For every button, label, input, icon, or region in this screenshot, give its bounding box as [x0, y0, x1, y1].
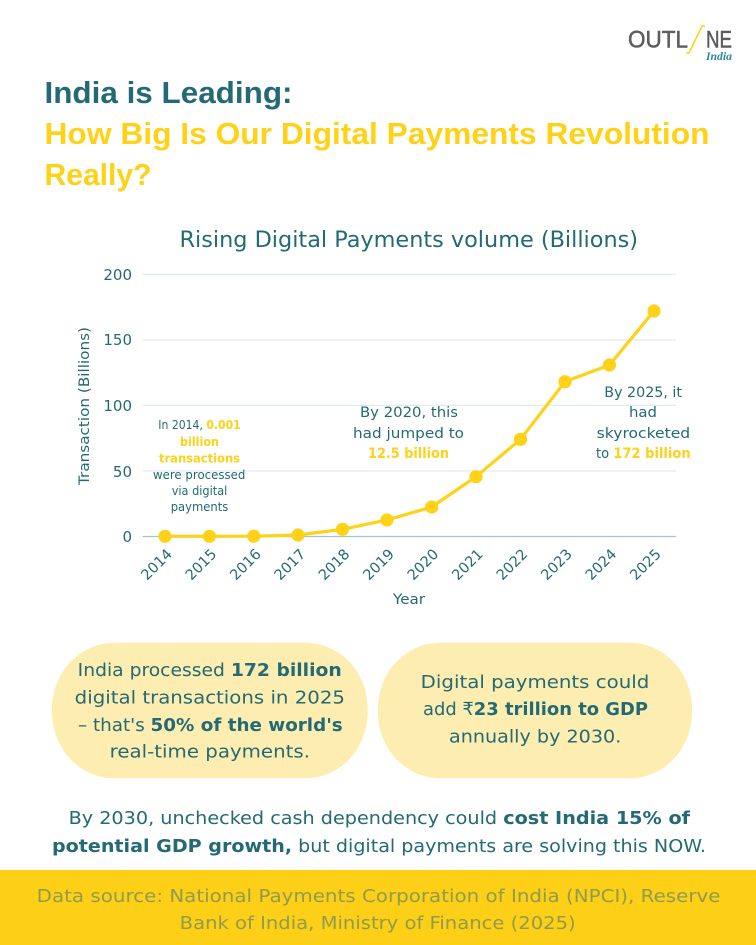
panel: 172 billion transactions: – that's 50% of the world's	[78, 715, 343, 736]
annotation: 2020: By 2020, this	[360, 405, 458, 421]
annotation: 2014: were processed	[153, 468, 245, 482]
panel: 172 billion transactions	[52, 643, 368, 778]
y axis title: Transaction (Billions)	[77, 327, 93, 486]
footer: data source band: Data source: National Payments Corporation of India (NPCI), Reserve	[37, 886, 720, 907]
text block: cash dependency conclusion: By 2030, unchecked cash dependency could cost India 15% of	[69, 808, 690, 829]
x axis labels: 2018	[316, 546, 353, 584]
y axis labels	[103, 266, 132, 546]
annotation: 2014: In 2014, 0.001	[158, 418, 241, 432]
footer: data source band	[0, 870, 756, 945]
annotation: 2025: skyrocketed	[597, 426, 690, 442]
data points	[158, 304, 661, 543]
annotation: 2025: By 2025, it	[604, 385, 682, 401]
x axis labels: 2016	[227, 546, 265, 584]
x axis labels: 2015	[183, 546, 220, 584]
logo: Outline India: NE	[706, 27, 732, 54]
chart title: Rising Digital Payments volume (Billions)	[180, 228, 638, 253]
data line	[165, 311, 654, 536]
annotation: 2014: via digital	[172, 484, 227, 498]
panel: 23 trillion to GDP	[378, 643, 692, 778]
panel: 172 billion transactions: real-time payments.	[110, 742, 310, 763]
annotation: 2020	[353, 405, 464, 462]
panel: 172 billion transactions: digital transactions in 2025	[75, 687, 345, 708]
logo: Outline India: India	[705, 49, 732, 63]
x axis labels: 2014	[138, 546, 176, 584]
x axis labels: 2021	[449, 546, 487, 584]
x axis labels: 2017	[272, 546, 309, 584]
text block: cash dependency conclusion: potential GDP growth, but digital payments are solving this NOW.	[52, 836, 706, 857]
title	[44, 75, 710, 192]
annotation: 2020: 12.5 billion	[368, 446, 449, 462]
x axis labels: 2020	[405, 546, 442, 584]
x axis labels: 2025	[627, 546, 665, 584]
x axis labels: 2019	[360, 546, 398, 584]
annotation: 2014: payments	[171, 500, 228, 514]
y axis labels: 50	[113, 463, 132, 481]
logo: Outline India: OUTL	[628, 27, 688, 54]
logo: Outline India	[628, 26, 732, 63]
annotation: 2020: had jumped to	[353, 426, 464, 442]
panel: 172 billion transactions: India processed 172 billion	[78, 660, 342, 681]
title: Really?	[44, 157, 152, 192]
chart: rising digital payments volume line chart	[77, 228, 691, 608]
annotation: 2014: transactions	[159, 452, 240, 466]
x axis labels: 2022	[494, 546, 531, 584]
footer: data source band: Bank of India, Ministry of Finance (2025)	[180, 913, 576, 934]
annotation: 2025: had	[629, 405, 657, 421]
title: India is Leading:	[44, 75, 292, 110]
panel: 23 trillion to GDP: Digital payments could	[421, 672, 649, 693]
x axis labels: 2023	[538, 546, 576, 584]
x axis title: Year	[392, 592, 425, 608]
x axis labels	[138, 546, 665, 584]
y axis labels: 200	[103, 266, 132, 284]
panel: 23 trillion to GDP: add ₹23 trillion to GDP	[423, 699, 648, 720]
text block: cash dependency conclusion	[52, 808, 706, 857]
y axis labels: 0	[122, 528, 132, 546]
panel: 23 trillion to GDP: annually by 2030.	[449, 727, 621, 748]
y axis labels: 150	[103, 331, 132, 349]
annotation: 2025	[596, 385, 691, 462]
annotation: 2025: to 172 billion	[596, 446, 691, 462]
x axis labels: 2024	[583, 546, 620, 584]
y axis labels: 100	[103, 397, 132, 415]
title: How Big Is Our Digital Payments Revolution	[44, 116, 710, 151]
annotation: 2014	[153, 418, 245, 514]
annotation: 2014: billion	[180, 435, 219, 449]
